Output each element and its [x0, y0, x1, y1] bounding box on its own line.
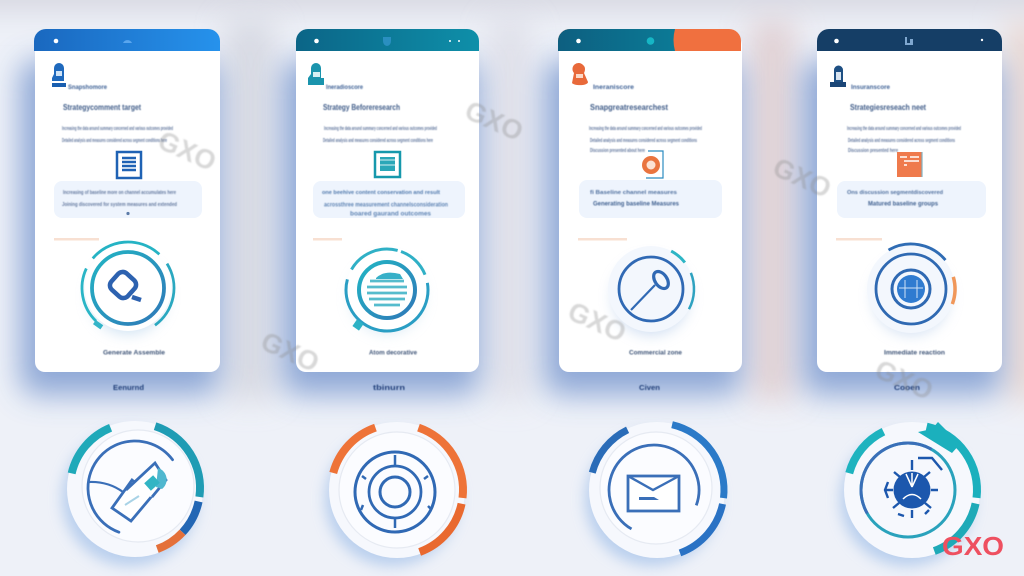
card 1 accent	[54, 238, 99, 240]
bottom badge 2: dial	[313, 406, 481, 574]
card 1 header	[34, 29, 220, 51]
card 2 ring icon	[331, 234, 443, 346]
card 4 callout: Ons discussion segmentdiscovered	[847, 190, 943, 196]
card 2 callout: one beehive content conservation and result	[322, 190, 440, 196]
bottom badge 4: globe	[832, 410, 992, 570]
panel: card 3	[558, 29, 742, 372]
card 1 text: Snapshomore	[68, 84, 107, 91]
card 4 text: Insuranscore	[851, 84, 890, 91]
card 4 callout: Matured baseline groups	[868, 200, 938, 208]
card 2 logo icon	[308, 63, 324, 85]
bottom badge 3: envelope	[575, 408, 739, 572]
card 2 text: Increasing the data around summary concerned and various outcomes provided	[324, 126, 437, 132]
brand mark: GXO	[942, 531, 1004, 561]
card 2 header	[296, 29, 479, 51]
card 3 callout	[579, 180, 722, 218]
card 2 callout: acrossthree measurement channelsconsideration	[324, 202, 448, 208]
card 1 logo icon	[52, 63, 66, 87]
card 4 text: Discussion presented here	[848, 148, 898, 154]
card 3 ring icon	[593, 231, 709, 347]
card 4 document icon	[897, 152, 922, 177]
card 2 document icon	[375, 152, 400, 177]
card 4 label: Cooen	[894, 383, 920, 392]
card 3 logo icon	[572, 63, 588, 85]
watermarks	[154, 95, 938, 406]
panel: card 1	[34, 29, 220, 372]
card 1 label: Eenurnd	[113, 383, 144, 392]
watermarks: GXO	[564, 296, 631, 348]
card 1 ring icon	[63, 223, 193, 353]
card 3 callout: Generating baseline Measures	[593, 200, 679, 208]
card 2 caption: Atom decorative	[369, 350, 417, 356]
card 3 caption: Commercial zone	[629, 350, 682, 356]
card 4 text	[847, 84, 961, 154]
card 2 callout	[313, 181, 465, 218]
card 1 document icon	[117, 152, 141, 178]
card 1 text: Strategycomment target	[63, 103, 141, 112]
card 3 document icon	[642, 151, 663, 178]
watermarks: GXO	[257, 326, 324, 378]
card 3 label: Civen	[639, 383, 660, 392]
card 2 text	[323, 84, 437, 144]
card 4 logo icon	[830, 66, 846, 87]
card 3 callout: fi Baseline channel measures	[590, 190, 677, 196]
card 2 text: Detailed analysis and measures considered across segment conditions here	[323, 138, 433, 144]
card 3 text	[589, 84, 702, 154]
card 3 header	[558, 29, 741, 51]
card 2 accent	[313, 238, 342, 240]
panel: card 4	[817, 29, 1002, 372]
bottom badge 1: USB	[43, 396, 227, 576]
card 3 text: Ineraniscore	[593, 84, 634, 91]
card 1 caption: Generate Assemble	[103, 350, 165, 356]
card 3 text: Discussion presented about here	[590, 148, 645, 154]
card 3 text: Increasing the data around summary concerned and various outcomes provided	[589, 126, 702, 132]
watermarks: GXO	[461, 95, 528, 147]
panel: card 2	[296, 29, 479, 372]
watermarks: GXO	[769, 152, 836, 204]
card 4 text: Strategiesreseach neet	[850, 103, 926, 112]
background shadows	[0, 0, 1024, 400]
card 1 callout: Increasing of baseline more on channel accumulates here	[63, 190, 176, 196]
card 1 callout	[54, 181, 202, 218]
card 1 text: Increasing the data around summary concerned and various outcomes provided	[62, 126, 173, 132]
card 3 text: Snapgreatresearchest	[590, 103, 668, 112]
card 2 text: Ineradioscore	[326, 84, 363, 91]
card 4 callout	[837, 181, 986, 218]
card 3 accent	[578, 238, 627, 240]
card 4 ring icon	[850, 228, 972, 350]
card 4 accent	[836, 238, 882, 240]
watermarks: GXO	[154, 125, 221, 177]
card 1 text	[62, 84, 173, 144]
card 3 text: Detailed analysis and measures considered across segment conditions	[590, 138, 697, 144]
card 1 text: Detailed analysis and measures considered across segment conditions here	[62, 138, 167, 144]
card 4 header	[817, 29, 1002, 51]
watermarks: GXO	[871, 354, 938, 406]
card 2 text: Strategy Beforeresearch	[323, 103, 400, 112]
card 4 text: Detailed analysis and measures considered across segment conditions	[848, 138, 955, 144]
card 2 callout: boared gaurand outcomes	[350, 210, 431, 218]
card 2 label: tbinurn	[373, 383, 406, 392]
card 4 caption: Immediate reaction	[884, 350, 945, 356]
card 1 callout: Joining discovered for system measures and extended	[62, 202, 177, 208]
